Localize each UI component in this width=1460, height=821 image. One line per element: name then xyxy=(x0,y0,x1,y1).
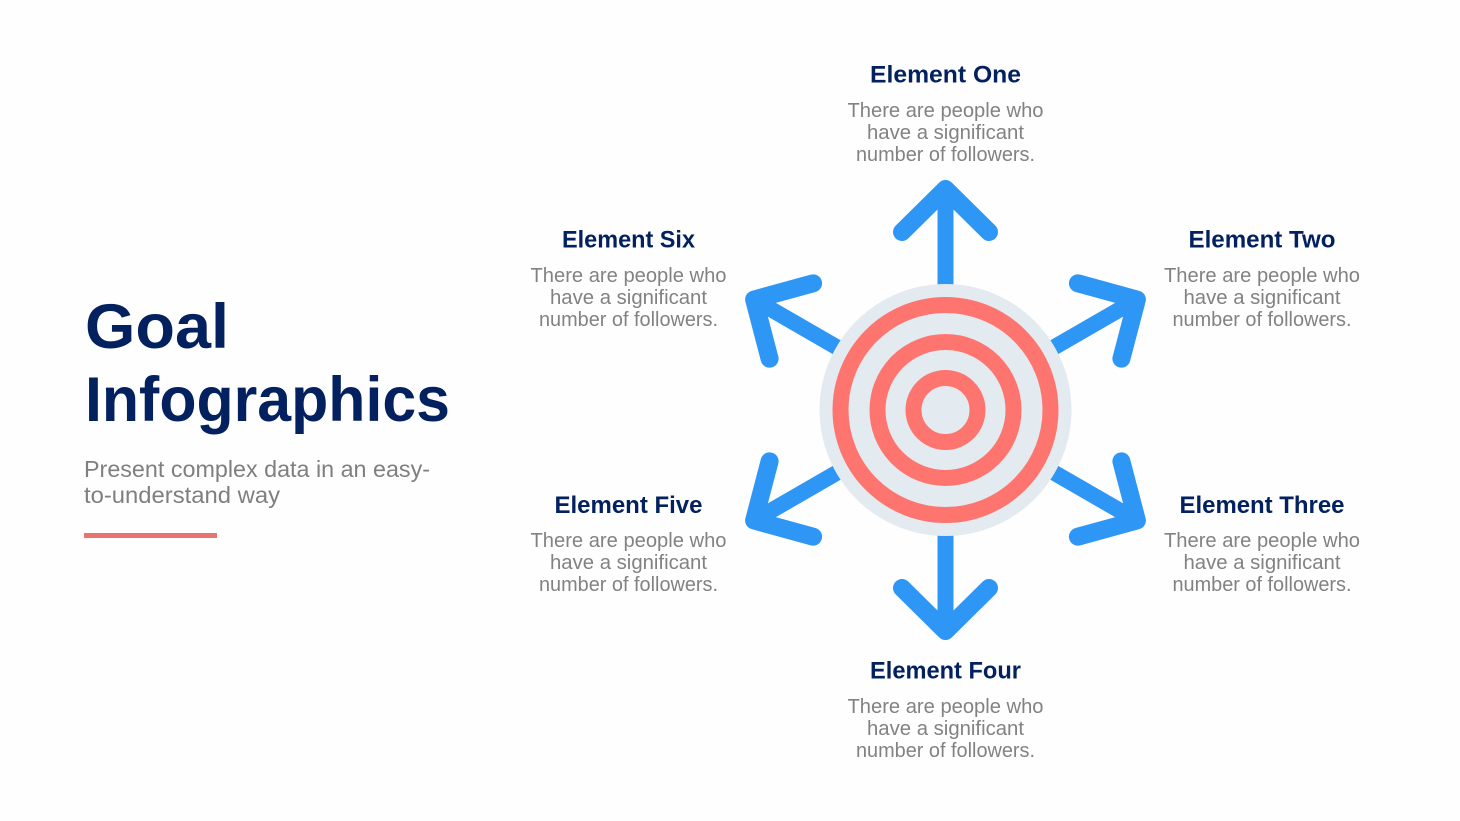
text block: element two: number of followers. xyxy=(1172,309,1352,331)
text block: element five: There are people who xyxy=(530,530,726,552)
accent rule xyxy=(84,533,217,538)
text block: element six: number of followers. xyxy=(539,309,718,331)
text block: element three: number of followers. xyxy=(1172,574,1352,596)
icon: target xyxy=(820,284,1072,536)
text block: element four: There are people who xyxy=(848,696,1044,718)
text block: element two xyxy=(1164,226,1360,331)
text block: element four xyxy=(848,658,1044,762)
text block: element one xyxy=(848,62,1044,166)
text block: element six: There are people who xyxy=(530,265,726,287)
arrow: down xyxy=(902,520,989,631)
text block: element one: number of followers. xyxy=(856,144,1035,166)
text block: element one: Element One xyxy=(870,62,1021,88)
subtitle: to-understand way xyxy=(84,482,281,508)
arrow: lower left xyxy=(732,427,872,558)
text block: element three xyxy=(1164,492,1360,596)
text block: element four: number of followers. xyxy=(856,740,1035,762)
text block: element five: number of followers. xyxy=(539,574,718,596)
text block: element one: have a significant xyxy=(867,122,1024,144)
text block: element six xyxy=(530,226,726,331)
text block: element three: There are people who xyxy=(1164,530,1360,552)
arrow: lower right xyxy=(1019,427,1159,558)
text block: element four: Element Four xyxy=(870,658,1021,684)
text block: element two: There are people who xyxy=(1164,265,1360,287)
text block: element four: have a significant xyxy=(867,718,1024,740)
text block: element six: Element Six xyxy=(562,226,696,254)
text block: element five: Element Five xyxy=(554,492,702,519)
text block: element five: have a significant xyxy=(550,552,707,574)
text block: element six: have a significant xyxy=(550,287,707,309)
text block: element two: have a significant xyxy=(1184,287,1341,309)
text block: element two: Element Two xyxy=(1188,226,1336,254)
text block: element five xyxy=(530,492,726,596)
title xyxy=(85,292,450,435)
title: Infographics xyxy=(85,365,450,435)
arrow: upper left xyxy=(732,262,872,393)
arrow: upper right xyxy=(1019,262,1159,393)
text block: element three: have a significant xyxy=(1184,552,1341,574)
arrow: up xyxy=(902,189,989,300)
title: Goal xyxy=(85,292,229,362)
subtitle: Present complex data in an easy- xyxy=(84,456,430,482)
subtitle xyxy=(84,456,430,508)
text block: element three: Element Three xyxy=(1180,492,1344,519)
text block: element one: There are people who xyxy=(848,100,1044,122)
